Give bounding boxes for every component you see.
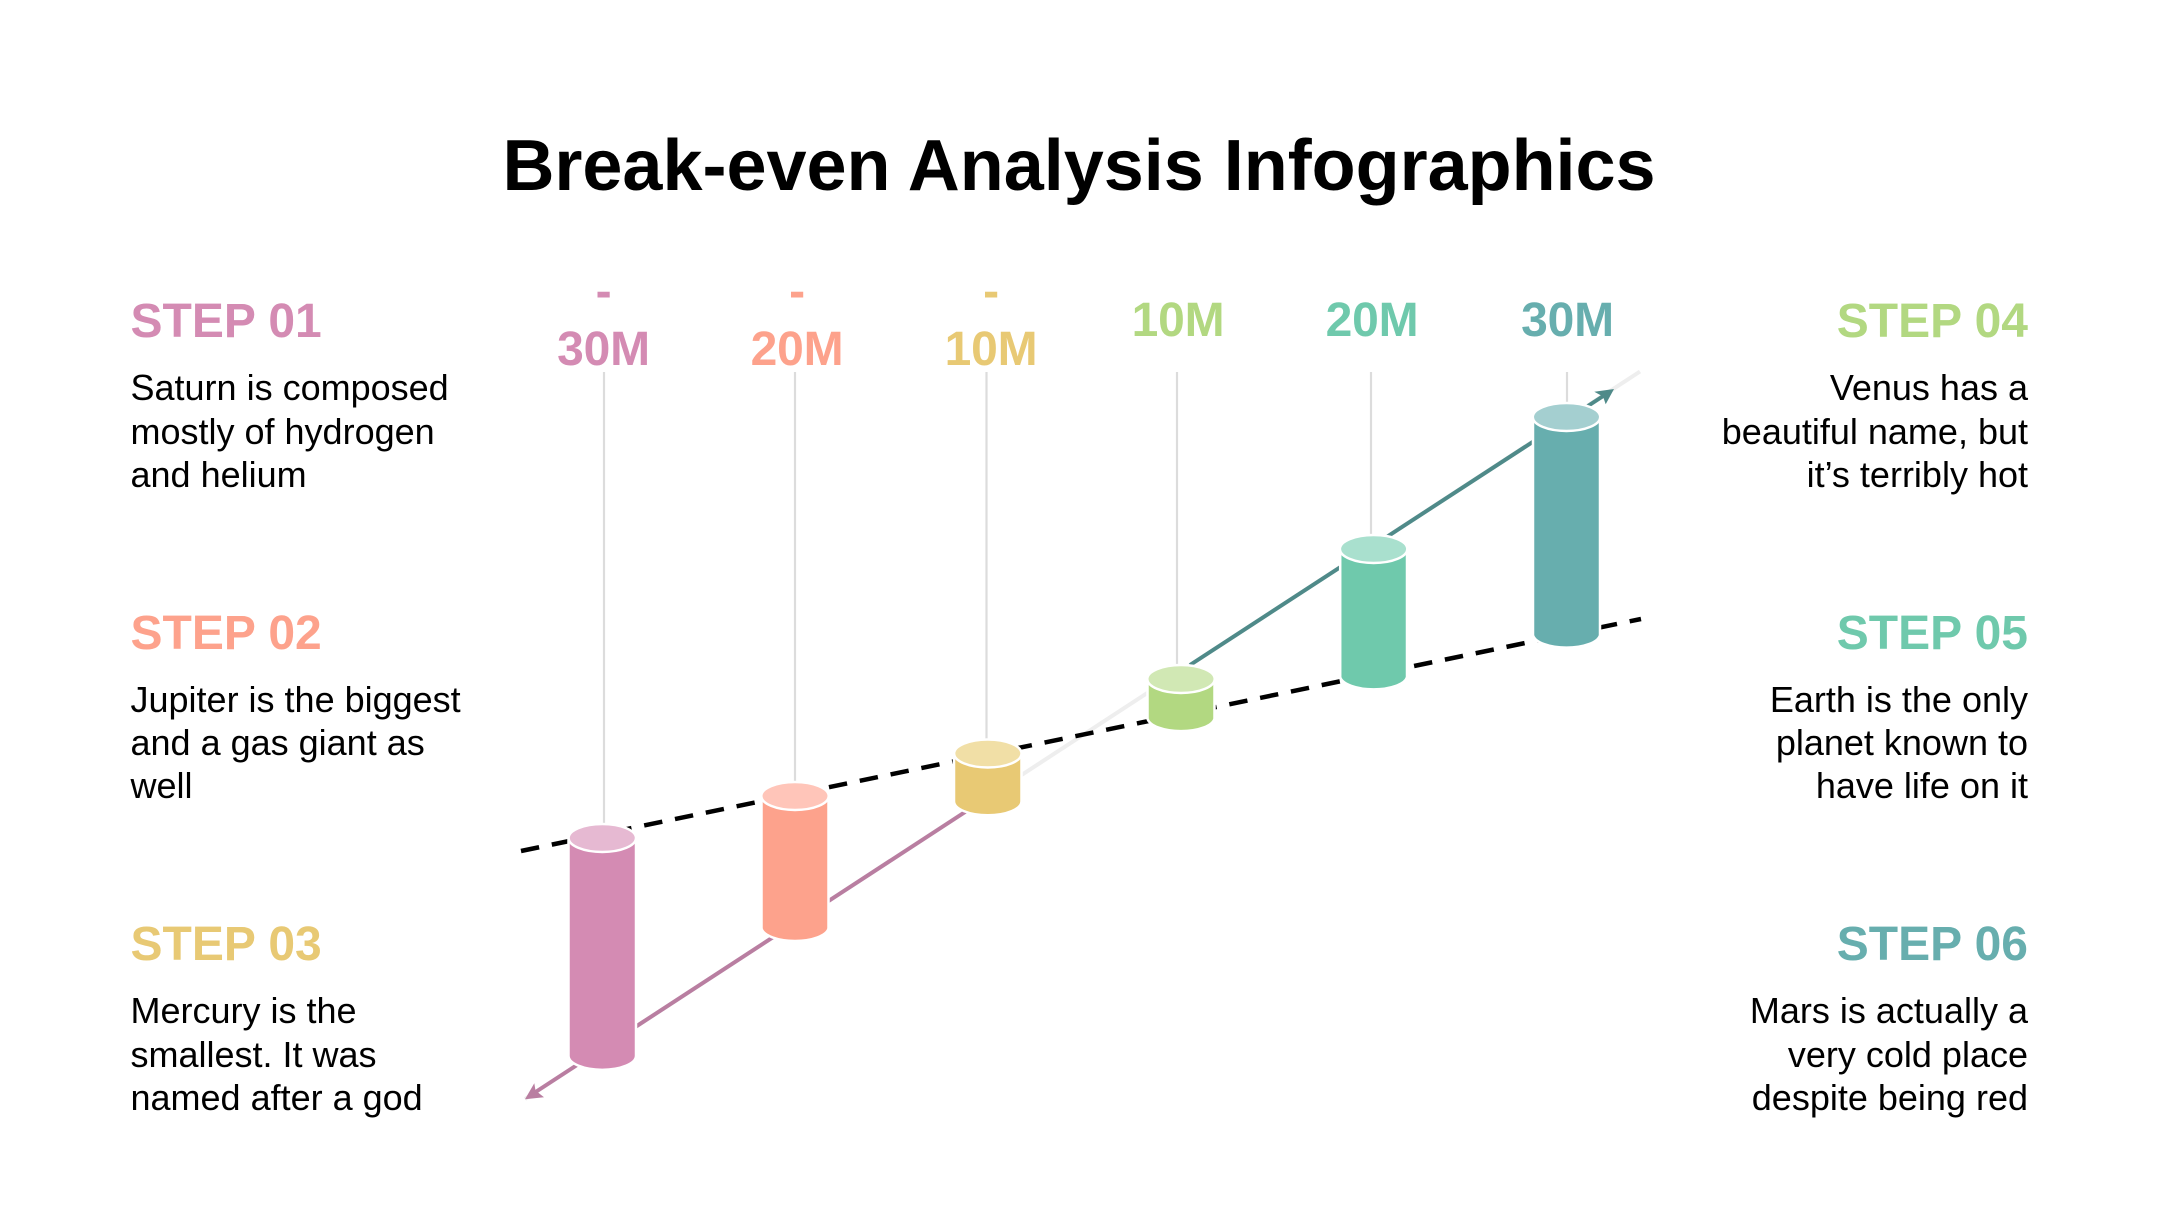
heading: step 01: STEP 01 bbox=[130, 295, 322, 348]
cylinder: -30M bbox=[568, 824, 636, 1070]
text: step 04 bbox=[1722, 367, 2028, 495]
text: step 03: Mercury is the bbox=[130, 990, 357, 1031]
panel: step 01 bbox=[130, 295, 449, 495]
value label: -20M bbox=[751, 265, 843, 376]
text: step 03: smallest. It was bbox=[130, 1034, 377, 1075]
text: step 04: beautiful name, but bbox=[1722, 411, 2028, 452]
text: step 06 bbox=[1750, 990, 2028, 1118]
cylinder: 20M bbox=[1340, 535, 1407, 689]
text: step 01 bbox=[130, 367, 449, 495]
heading: step 03: STEP 03 bbox=[130, 918, 322, 971]
heading: step 02: STEP 02 bbox=[130, 607, 322, 660]
text: step 02: and a gas giant as bbox=[130, 722, 425, 763]
text: step 05: have life on it bbox=[1816, 765, 2028, 806]
loss line with arrow bbox=[525, 799, 985, 1099]
panel: step 04 bbox=[1722, 295, 2028, 495]
text: step 06: despite being red bbox=[1752, 1077, 2028, 1118]
panel: step 06 bbox=[1750, 918, 2028, 1118]
value label: -20M: - bbox=[789, 265, 805, 318]
guide line: faint diagonal bbox=[525, 372, 1640, 1099]
heading: step 04: STEP 04 bbox=[1837, 295, 2028, 348]
cylinder: -20M bbox=[761, 782, 829, 941]
text: step 01: and helium bbox=[130, 454, 307, 495]
title: Break-even Analysis Infographics bbox=[502, 126, 1656, 206]
text: step 05 bbox=[1770, 679, 2028, 806]
value label: 30M: 30M bbox=[1521, 294, 1614, 346]
value label: -20M: 20M bbox=[751, 323, 843, 376]
text: step 02 bbox=[130, 679, 461, 806]
text: step 05: planet known to bbox=[1776, 722, 2028, 763]
heading: step 05: STEP 05 bbox=[1837, 607, 2028, 660]
value label: -10M bbox=[945, 265, 1037, 376]
text: step 03 bbox=[130, 990, 423, 1118]
value label: -30M bbox=[557, 265, 650, 376]
text: step 06: Mars is actually a bbox=[1750, 990, 2028, 1031]
value label: 20M: 20M bbox=[1326, 294, 1418, 346]
cylinder: -10M bbox=[954, 740, 1022, 815]
value label: -30M: - bbox=[596, 265, 611, 318]
text: step 05: Earth is the only bbox=[1770, 679, 2028, 720]
text: step 01: mostly of hydrogen bbox=[130, 411, 435, 452]
value label: -10M: 10M bbox=[945, 323, 1037, 376]
text: step 04: it’s terribly hot bbox=[1807, 454, 2028, 495]
text: step 02: well bbox=[130, 765, 193, 806]
break-even dashed line bbox=[521, 619, 1641, 851]
text: step 06: very cold place bbox=[1788, 1034, 2028, 1075]
text: step 02: Jupiter is the biggest bbox=[130, 679, 461, 720]
value label: -10M: - bbox=[983, 265, 999, 318]
panel: step 02 bbox=[130, 607, 461, 806]
value label: -30M: 30M bbox=[557, 323, 650, 376]
heading: step 06: STEP 06 bbox=[1837, 918, 2028, 971]
value label: 10M: 10M bbox=[1132, 294, 1224, 346]
cylinder: 30M bbox=[1533, 403, 1600, 648]
panel: step 03 bbox=[130, 918, 423, 1118]
profit line with arrow bbox=[1190, 389, 1614, 665]
panel: step 05 bbox=[1770, 607, 2028, 806]
text: step 04: Venus has a bbox=[1830, 367, 2028, 408]
vertical leader lines bbox=[604, 372, 1567, 830]
cylinder: 10M bbox=[1147, 665, 1215, 731]
text: step 03: named after a god bbox=[130, 1077, 423, 1118]
text: step 01: Saturn is composed bbox=[130, 367, 449, 408]
